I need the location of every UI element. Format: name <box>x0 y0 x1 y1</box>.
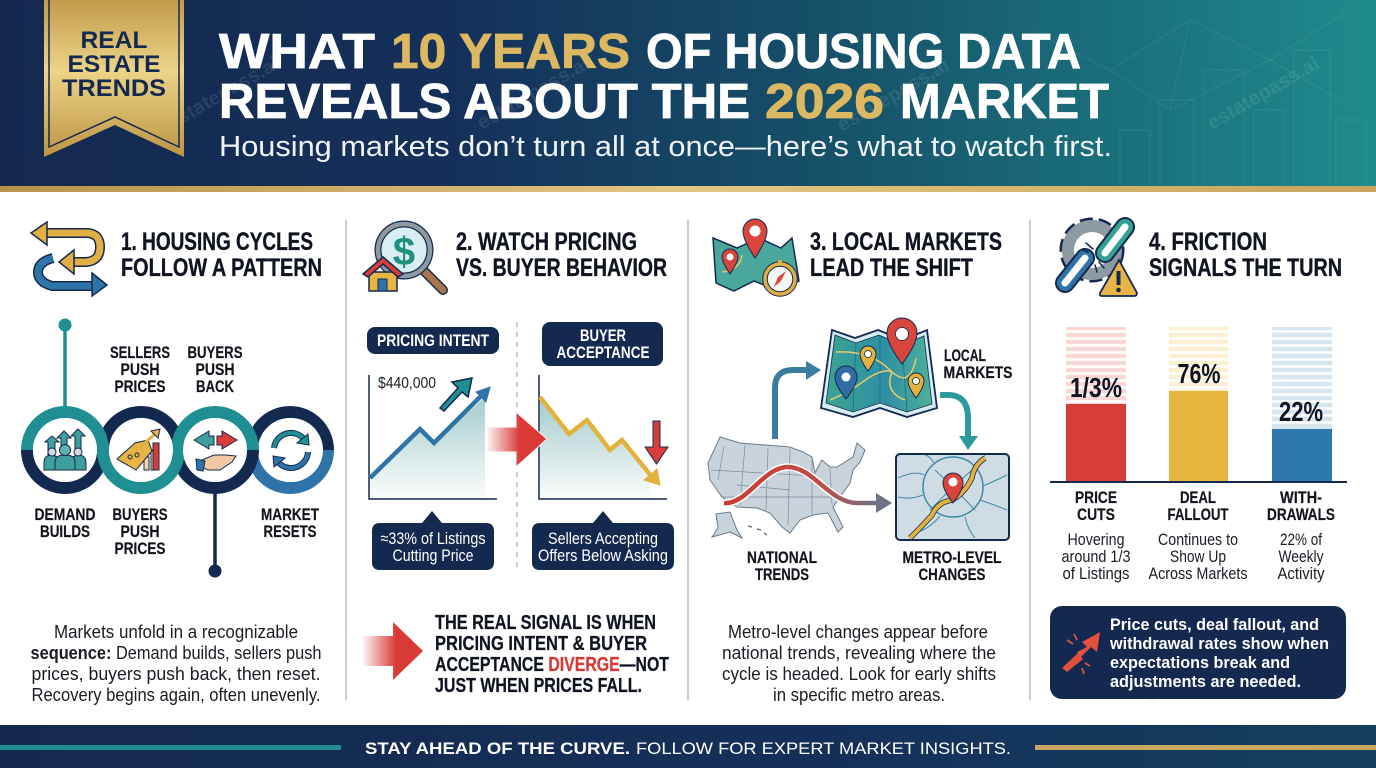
callout box: withdrawal rates show when <box>1109 634 1329 653</box>
heading <box>121 228 322 282</box>
label: local markets: MARKETS <box>944 363 1012 382</box>
watermarks: estatepass.ai <box>474 52 593 134</box>
callout: listings cutting price: ≈33% of Listings <box>380 529 486 548</box>
key signal text: THE REAL SIGNAL IS WHEN <box>435 612 656 634</box>
panel: housing cycles <box>27 222 328 705</box>
watermarks: estatepass.ai <box>164 52 283 134</box>
ribbon badge: REAL <box>80 27 148 54</box>
icon: push back <box>194 431 237 471</box>
icon: magnifier with house <box>363 224 443 291</box>
body text <box>722 622 996 705</box>
icon: demand crowd <box>44 429 86 470</box>
bar labels: WITH- <box>1280 488 1322 507</box>
watermarks <box>164 52 1323 709</box>
footer band: FOLLOW FOR EXPERT MARKET INSIGHTS. <box>636 739 1011 758</box>
title: WHAT <box>219 25 375 79</box>
step labels <box>34 343 319 558</box>
bar: deal fallout: 76% <box>1178 358 1221 389</box>
pill: pricing intent: PRICING INTENT <box>377 331 489 350</box>
callout box <box>1050 606 1346 699</box>
title: MARKET <box>900 75 1109 129</box>
pill: buyer acceptance: ACCEPTANCE <box>556 343 650 362</box>
bar descriptions: Hovering <box>1068 531 1124 549</box>
illustration: local map <box>821 318 937 417</box>
icon: reset arrows <box>273 433 309 468</box>
bar descriptions: 22% of <box>1280 531 1322 549</box>
ribbon badge: ESTATE <box>68 51 160 78</box>
step labels: PRICES <box>114 539 166 558</box>
callout: listings cutting price: Cutting Price <box>392 546 474 565</box>
pill: buyer acceptance <box>542 322 663 366</box>
step labels: RESETS <box>264 522 316 541</box>
bar labels: CUTS <box>1077 505 1115 524</box>
callout: listings cutting price <box>372 511 494 570</box>
labels: national and metro <box>747 548 1002 584</box>
key signal text: PRICING INTENT & BUYER <box>435 633 647 655</box>
step labels: DEMAND <box>34 505 96 524</box>
heading <box>456 228 667 282</box>
body text: Recovery begins again, often unevenly. <box>32 685 320 705</box>
body text: in specific metro areas. <box>773 685 945 705</box>
bar labels: FALLOUT <box>1168 505 1229 524</box>
step labels: PUSH <box>120 360 160 379</box>
bar descriptions: Weekly <box>1278 548 1324 566</box>
illustration: metro map <box>896 454 1009 540</box>
bar descriptions: Continues to <box>1158 531 1238 549</box>
body text: prices, buyers push back, then reset. <box>32 664 320 684</box>
callout: sellers accepting: Sellers Accepting <box>548 529 658 548</box>
labels: national and metro: TRENDS <box>755 565 809 584</box>
heading: VS. BUYER BEHAVIOR <box>456 254 667 282</box>
pill: buyer acceptance: BUYER <box>580 326 626 345</box>
panel dividers <box>346 220 1030 700</box>
bar labels: PRICE <box>1075 488 1117 507</box>
label: local markets: LOCAL <box>944 346 986 365</box>
labels: national and metro: METRO-LEVEL <box>902 548 1002 567</box>
labels: national and metro: NATIONAL <box>747 548 817 567</box>
panel: pricing vs behavior <box>363 224 674 697</box>
step labels: BUYERS <box>112 505 168 524</box>
panel: local markets <box>708 219 1012 705</box>
heading: 2. WATCH PRICING <box>456 228 637 256</box>
chart: pricing intent: $440,000 <box>378 375 436 392</box>
icon: price tag <box>117 429 160 470</box>
watermarks: estatepass.ai <box>1204 52 1323 134</box>
key signal text: ACCEPTANCE DIVERGE—NOT <box>435 654 669 676</box>
watermarks: estatepass.ai <box>834 54 953 136</box>
step labels: SELLERS <box>110 343 170 362</box>
step labels: PUSH <box>196 360 234 379</box>
panel: friction signals <box>1050 224 1347 699</box>
bar descriptions: of Listings <box>1062 565 1130 583</box>
title: OF HOUSING DATA <box>646 25 1081 79</box>
footer band <box>0 725 1376 768</box>
body text: Metro-level changes appear before <box>728 622 988 642</box>
heading <box>810 228 1002 282</box>
illustration: us map <box>708 437 865 538</box>
pill: pricing intent <box>367 327 499 354</box>
callout box: expectations break and <box>1110 653 1290 672</box>
bar descriptions: Across Markets <box>1148 565 1248 583</box>
bar: withdrawals <box>1272 327 1332 482</box>
step labels: PUSH <box>120 522 160 541</box>
bar descriptions <box>1062 531 1325 583</box>
heading: 3. LOCAL MARKETS <box>810 228 1002 256</box>
heading: LEAD THE SHIFT <box>810 254 973 282</box>
bar labels <box>1075 488 1335 524</box>
bar labels: DEAL <box>1180 488 1216 507</box>
body text <box>30 622 322 705</box>
step labels: PRICES <box>114 377 166 396</box>
bar: withdrawals: 22% <box>1279 396 1323 427</box>
icon: broken arrow <box>1062 632 1100 674</box>
labels: national and metro: CHANGES <box>918 565 986 584</box>
chart: buyer acceptance <box>539 375 668 499</box>
key signal text <box>435 612 669 697</box>
arrow: local to metro <box>940 395 978 450</box>
heading: FOLLOW A PATTERN <box>121 254 322 282</box>
label: local markets <box>944 346 1012 382</box>
bar descriptions: Activity <box>1278 565 1325 583</box>
bar: price cuts <box>1066 327 1126 482</box>
bar: price cuts: 1/3% <box>1070 372 1122 403</box>
ribbon badge <box>44 0 184 157</box>
cycle chain diagram <box>27 318 328 578</box>
body text: cycle is headed. Look for early shifts <box>722 664 996 684</box>
title: 2026 <box>765 75 884 129</box>
icon: map pin and compass <box>713 219 799 294</box>
callout box: Price cuts, deal fallout, and <box>1110 615 1319 634</box>
bar: deal fallout <box>1169 327 1228 482</box>
arrow: signal <box>363 622 423 680</box>
watermarks: estatepass.ai <box>1142 627 1261 709</box>
icon: broken chain with gear and warning <box>1065 224 1137 296</box>
icon: cycle arrows <box>31 222 107 296</box>
step labels: BACK <box>196 377 235 396</box>
step labels: BUILDS <box>40 522 90 541</box>
callout: sellers accepting <box>532 511 674 570</box>
heading <box>1149 228 1342 282</box>
header band <box>0 0 1376 192</box>
heading: 4. FRICTION <box>1149 228 1267 256</box>
heading: 1. HOUSING CYCLES <box>121 228 313 256</box>
title: REVEALS ABOUT THE <box>219 75 750 129</box>
step labels: MARKET <box>261 505 319 524</box>
body text: national trends, revealing where the <box>722 643 996 663</box>
arrow: national to local <box>775 361 821 439</box>
subtitle: Housing markets don’t turn all at once—here’s what to watch first. <box>219 131 1112 163</box>
title <box>219 25 1109 129</box>
bar descriptions: Show Up <box>1170 548 1226 566</box>
bar labels: DRAWALS <box>1267 505 1335 524</box>
icon: magnifier with house: $ <box>393 230 415 274</box>
step labels: BUYERS <box>188 343 242 362</box>
footer band: STAY AHEAD OF THE CURVE. <box>365 739 630 758</box>
bar chart <box>1050 327 1347 483</box>
callout box: adjustments are needed. <box>1110 672 1301 691</box>
key signal text: JUST WHEN PRICES FALL. <box>435 675 642 697</box>
body text: Markets unfold in a recognizable <box>54 622 298 642</box>
bar descriptions: around 1/3 <box>1062 548 1130 566</box>
chart: pricing intent <box>369 375 497 499</box>
callout: sellers accepting: Offers Below Asking <box>538 546 668 565</box>
ribbon badge: TRENDS <box>62 75 166 102</box>
title: 10 YEARS <box>391 25 630 79</box>
arrow: red transition <box>487 412 547 467</box>
trend line arrow <box>724 467 892 513</box>
body text: sequence: Demand builds, sellers push <box>30 643 322 663</box>
